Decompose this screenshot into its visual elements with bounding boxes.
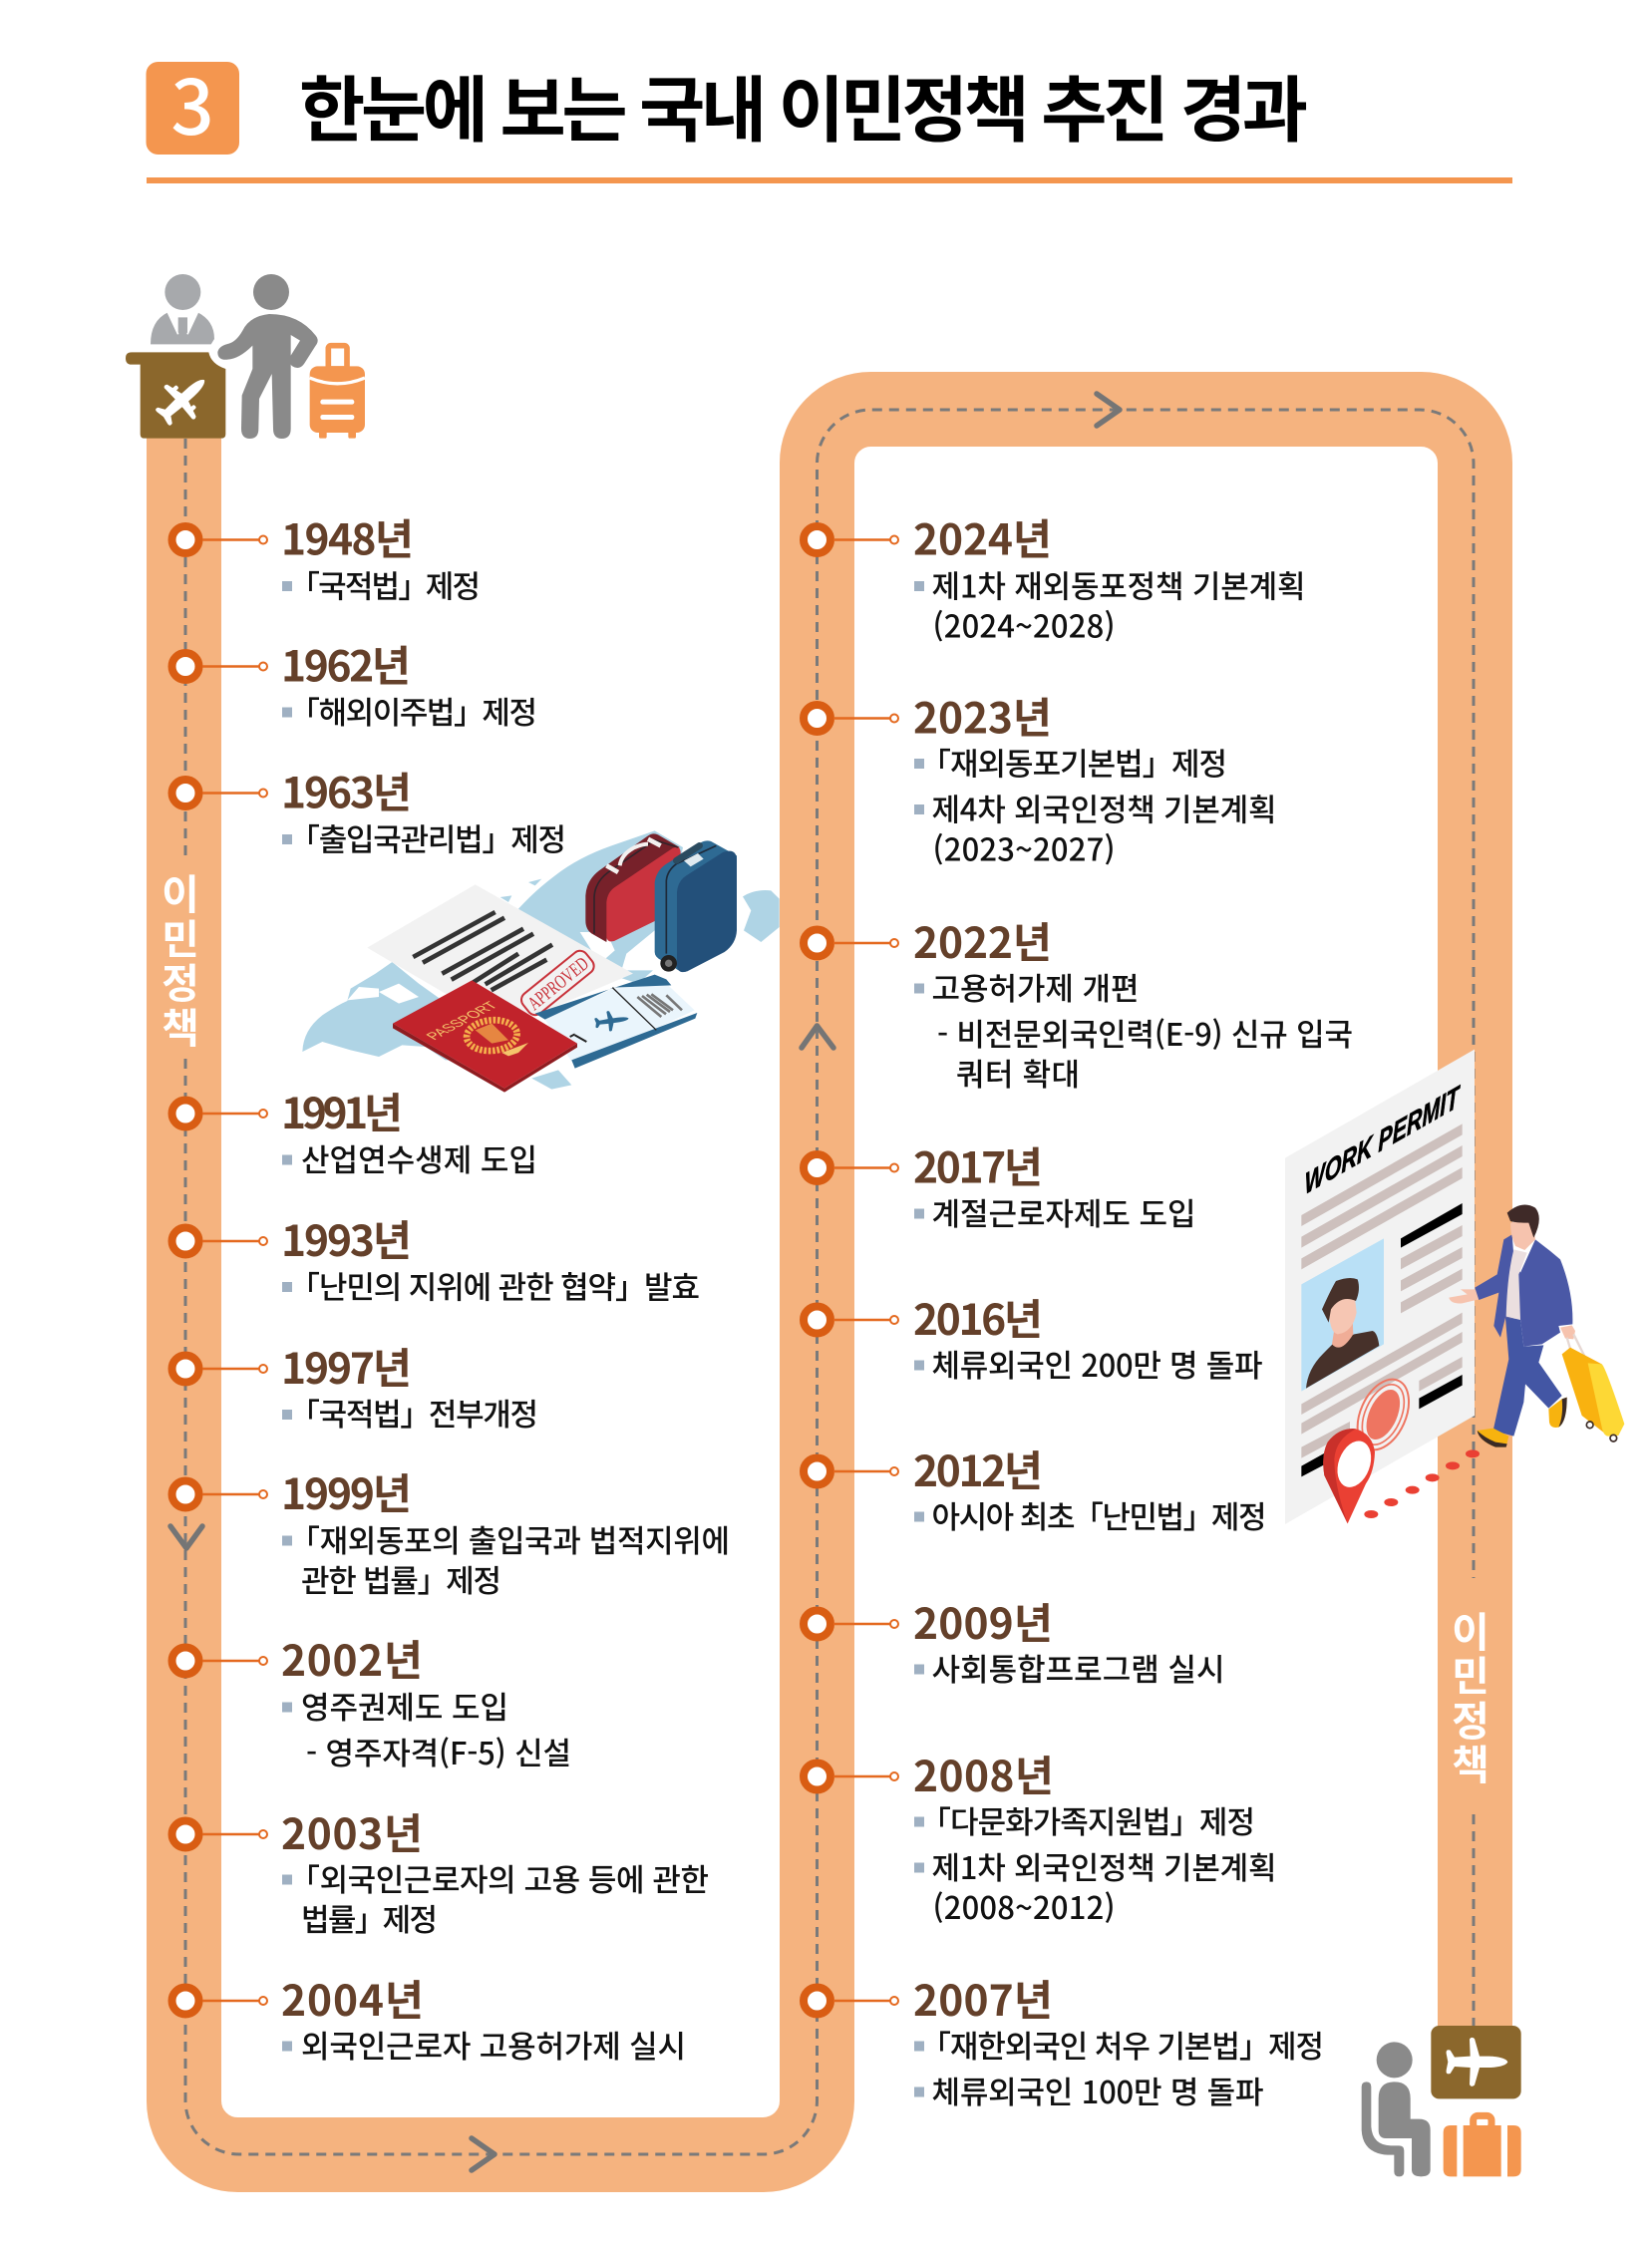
entry: 2017 bbox=[804, 1134, 1196, 1234]
entry: 2004 bbox=[171, 1968, 686, 2067]
entry: 2023: 2023년 bbox=[913, 686, 1052, 746]
entry: 2024 bbox=[804, 506, 1306, 646]
entry: 1962: 「해외이주법」 제정 bbox=[289, 688, 537, 733]
entry: 2003 bbox=[171, 1801, 709, 1940]
work permit document bbox=[1285, 1050, 1475, 1524]
entry: 2002 bbox=[171, 1628, 571, 1773]
entry: 2022: 고용허가제 개편 bbox=[931, 964, 1139, 1009]
entry: 2003: 법률」 제정 bbox=[301, 1895, 438, 1940]
entry: 2022 bbox=[804, 910, 1353, 1095]
document with approved stamp bbox=[367, 884, 633, 1018]
entry: 1962 bbox=[171, 634, 537, 733]
entry: 2003: 「외국인근로자의 고용 등에 관한 bbox=[289, 1855, 709, 1900]
entry: 1999: 관한 법률」 제정 bbox=[301, 1556, 501, 1601]
arrow: left down bbox=[170, 1526, 202, 1548]
entry: 2008: 2008년 bbox=[913, 1744, 1054, 1804]
entry: 2004: 2004년 bbox=[281, 1968, 424, 2029]
entry: 1948 bbox=[171, 506, 481, 606]
entry: 1997: 1997년 bbox=[281, 1336, 412, 1397]
entry: 2009: 사회통합프로그램 실시 bbox=[931, 1645, 1224, 1690]
entry: 2008: 「다문화가족지원법」 제정 bbox=[920, 1797, 1255, 1842]
entry: 1999 bbox=[171, 1461, 730, 1601]
vertical label: right: 책 bbox=[1452, 1732, 1489, 1791]
entry: 2012: 2012년 bbox=[913, 1439, 1043, 1499]
document with approved stamp: APPROVED bbox=[524, 953, 593, 1015]
entry: 2007: 2007년 bbox=[913, 1968, 1053, 2029]
entry: 1993 bbox=[171, 1208, 700, 1308]
entry: 2024: 2024년 bbox=[913, 506, 1052, 568]
entry: 2003: 2003년 bbox=[281, 1801, 423, 1862]
entry: 2002: - 영주자격(F-5) 신설 bbox=[306, 1729, 571, 1773]
timeline track bbox=[183, 409, 1476, 2155]
illustration: map, passport, ticket, luggage bbox=[302, 830, 780, 1093]
entry: 1963: 「출입국관리법」 제정 bbox=[289, 815, 566, 859]
vertical label: right: 민 bbox=[1452, 1643, 1489, 1703]
vertical label: right bbox=[1452, 1599, 1489, 1791]
entry: 2022: 2022년 bbox=[913, 910, 1052, 971]
entry: 2023: 「재외동포기본법」 제정 bbox=[920, 740, 1227, 784]
entry: 1991: 산업연수생제 도입 bbox=[301, 1135, 537, 1180]
number badge bbox=[146, 47, 239, 157]
entry: 2016 bbox=[804, 1287, 1262, 1386]
icon: waiting passenger, plane sign and briefcase bbox=[1362, 2026, 1521, 2176]
red suitcase bbox=[585, 833, 681, 942]
entry: 2009: 2009년 bbox=[913, 1591, 1053, 1652]
world map bbox=[302, 830, 780, 1090]
illustration: work permit with walking man bbox=[1285, 1050, 1624, 1524]
blue suitcase bbox=[655, 840, 737, 972]
entry: 1991: 1991년 bbox=[281, 1081, 403, 1141]
entry: 1997 bbox=[171, 1336, 538, 1435]
entry: 2022: - 비전문외국인력(E-9) 신규 입국 bbox=[937, 1010, 1353, 1055]
work permit document: WORK PERMIT bbox=[1305, 1078, 1461, 1201]
icon: check-in desk with traveler bbox=[126, 274, 365, 439]
entry: 2007: 「재한외국인 처우 기본법」 제정 bbox=[920, 2022, 1324, 2067]
entry: 2024: 제1차 재외동포정책 기본계획 bbox=[931, 562, 1306, 606]
entry: 2007 bbox=[804, 1968, 1324, 2112]
entry: 1997: 「국적법」 전부개정 bbox=[289, 1390, 538, 1435]
entry: 2016: 체류외국인 200만 명 돌파 bbox=[931, 1341, 1262, 1386]
vertical label: right: 정 bbox=[1452, 1688, 1489, 1748]
entry: 2023: 제4차 외국인정책 기본계획 bbox=[931, 786, 1276, 829]
entry: 2008: (2008~2012) bbox=[933, 1883, 1115, 1928]
entry: 2004: 외국인근로자 고용허가제 실시 bbox=[301, 2022, 686, 2067]
passport: PASSPORT bbox=[423, 1000, 501, 1043]
arrow: top right bbox=[1097, 394, 1120, 426]
entry: 1999: 「재외동포의 출입국과 법적지위에 bbox=[289, 1516, 730, 1561]
entry: 2023: (2023~2027) bbox=[933, 825, 1115, 869]
arrow: bottom right bbox=[472, 2138, 495, 2170]
title: 한눈에 보는 국내 이민정책 추진 경과 bbox=[299, 52, 1308, 157]
entry: 2017: 2017년 bbox=[913, 1134, 1043, 1196]
entry: 2017: 계절근로자제도 도입 bbox=[931, 1189, 1196, 1234]
entry: 2024: (2024~2028) bbox=[933, 602, 1115, 646]
entry: 2012 bbox=[804, 1439, 1266, 1537]
entry: 2002: 2002년 bbox=[281, 1628, 423, 1689]
number badge: 3 bbox=[170, 47, 214, 157]
vertical label: right: 이 bbox=[1452, 1599, 1489, 1659]
vertical label: left: 정 bbox=[162, 950, 199, 1010]
entry: 2002: 영주권제도 도입 bbox=[301, 1683, 508, 1728]
entry: 2012: 아시아 최초 「난민법」 제정 bbox=[931, 1492, 1266, 1537]
entry: 1993: 「난민의 지위에 관한 협약」 발효 bbox=[289, 1262, 700, 1308]
entry: 2007: 체류외국인 100만 명 돌파 bbox=[931, 2068, 1264, 2112]
entry: 1962: 1962년 bbox=[281, 634, 411, 694]
title rule bbox=[147, 177, 1512, 183]
entry: 1948: 「국적법」 제정 bbox=[289, 562, 481, 606]
boarding pass bbox=[535, 975, 697, 1069]
vertical label: left: 책 bbox=[162, 995, 199, 1055]
entry: 1999: 1999년 bbox=[281, 1461, 412, 1522]
entry: 2008: 제1차 외국인정책 기본계획 bbox=[931, 1843, 1276, 1888]
entry: 1963: 1963년 bbox=[281, 760, 412, 821]
entry: 2016: 2016년 bbox=[913, 1287, 1043, 1348]
entry: 1963 bbox=[171, 760, 566, 859]
entry: 2008 bbox=[804, 1744, 1276, 1928]
header bbox=[146, 47, 1512, 183]
arrow: centre up bbox=[802, 1026, 833, 1048]
entry: 2023 bbox=[804, 686, 1276, 869]
passport bbox=[393, 980, 577, 1093]
entry: 1991 bbox=[171, 1081, 537, 1180]
entry: 2022: 쿼터 확대 bbox=[956, 1050, 1080, 1095]
vertical label: left: 이 bbox=[162, 861, 199, 921]
entry: 1948: 1948년 bbox=[281, 506, 414, 568]
vertical label: left bbox=[162, 861, 199, 1055]
vertical label: left: 민 bbox=[162, 906, 199, 966]
entry: 2009 bbox=[804, 1591, 1224, 1690]
walking man with yellow suitcase bbox=[1449, 1204, 1624, 1447]
entry: 1993: 1993년 bbox=[281, 1208, 412, 1269]
location pin and trail bbox=[1323, 1429, 1480, 1523]
